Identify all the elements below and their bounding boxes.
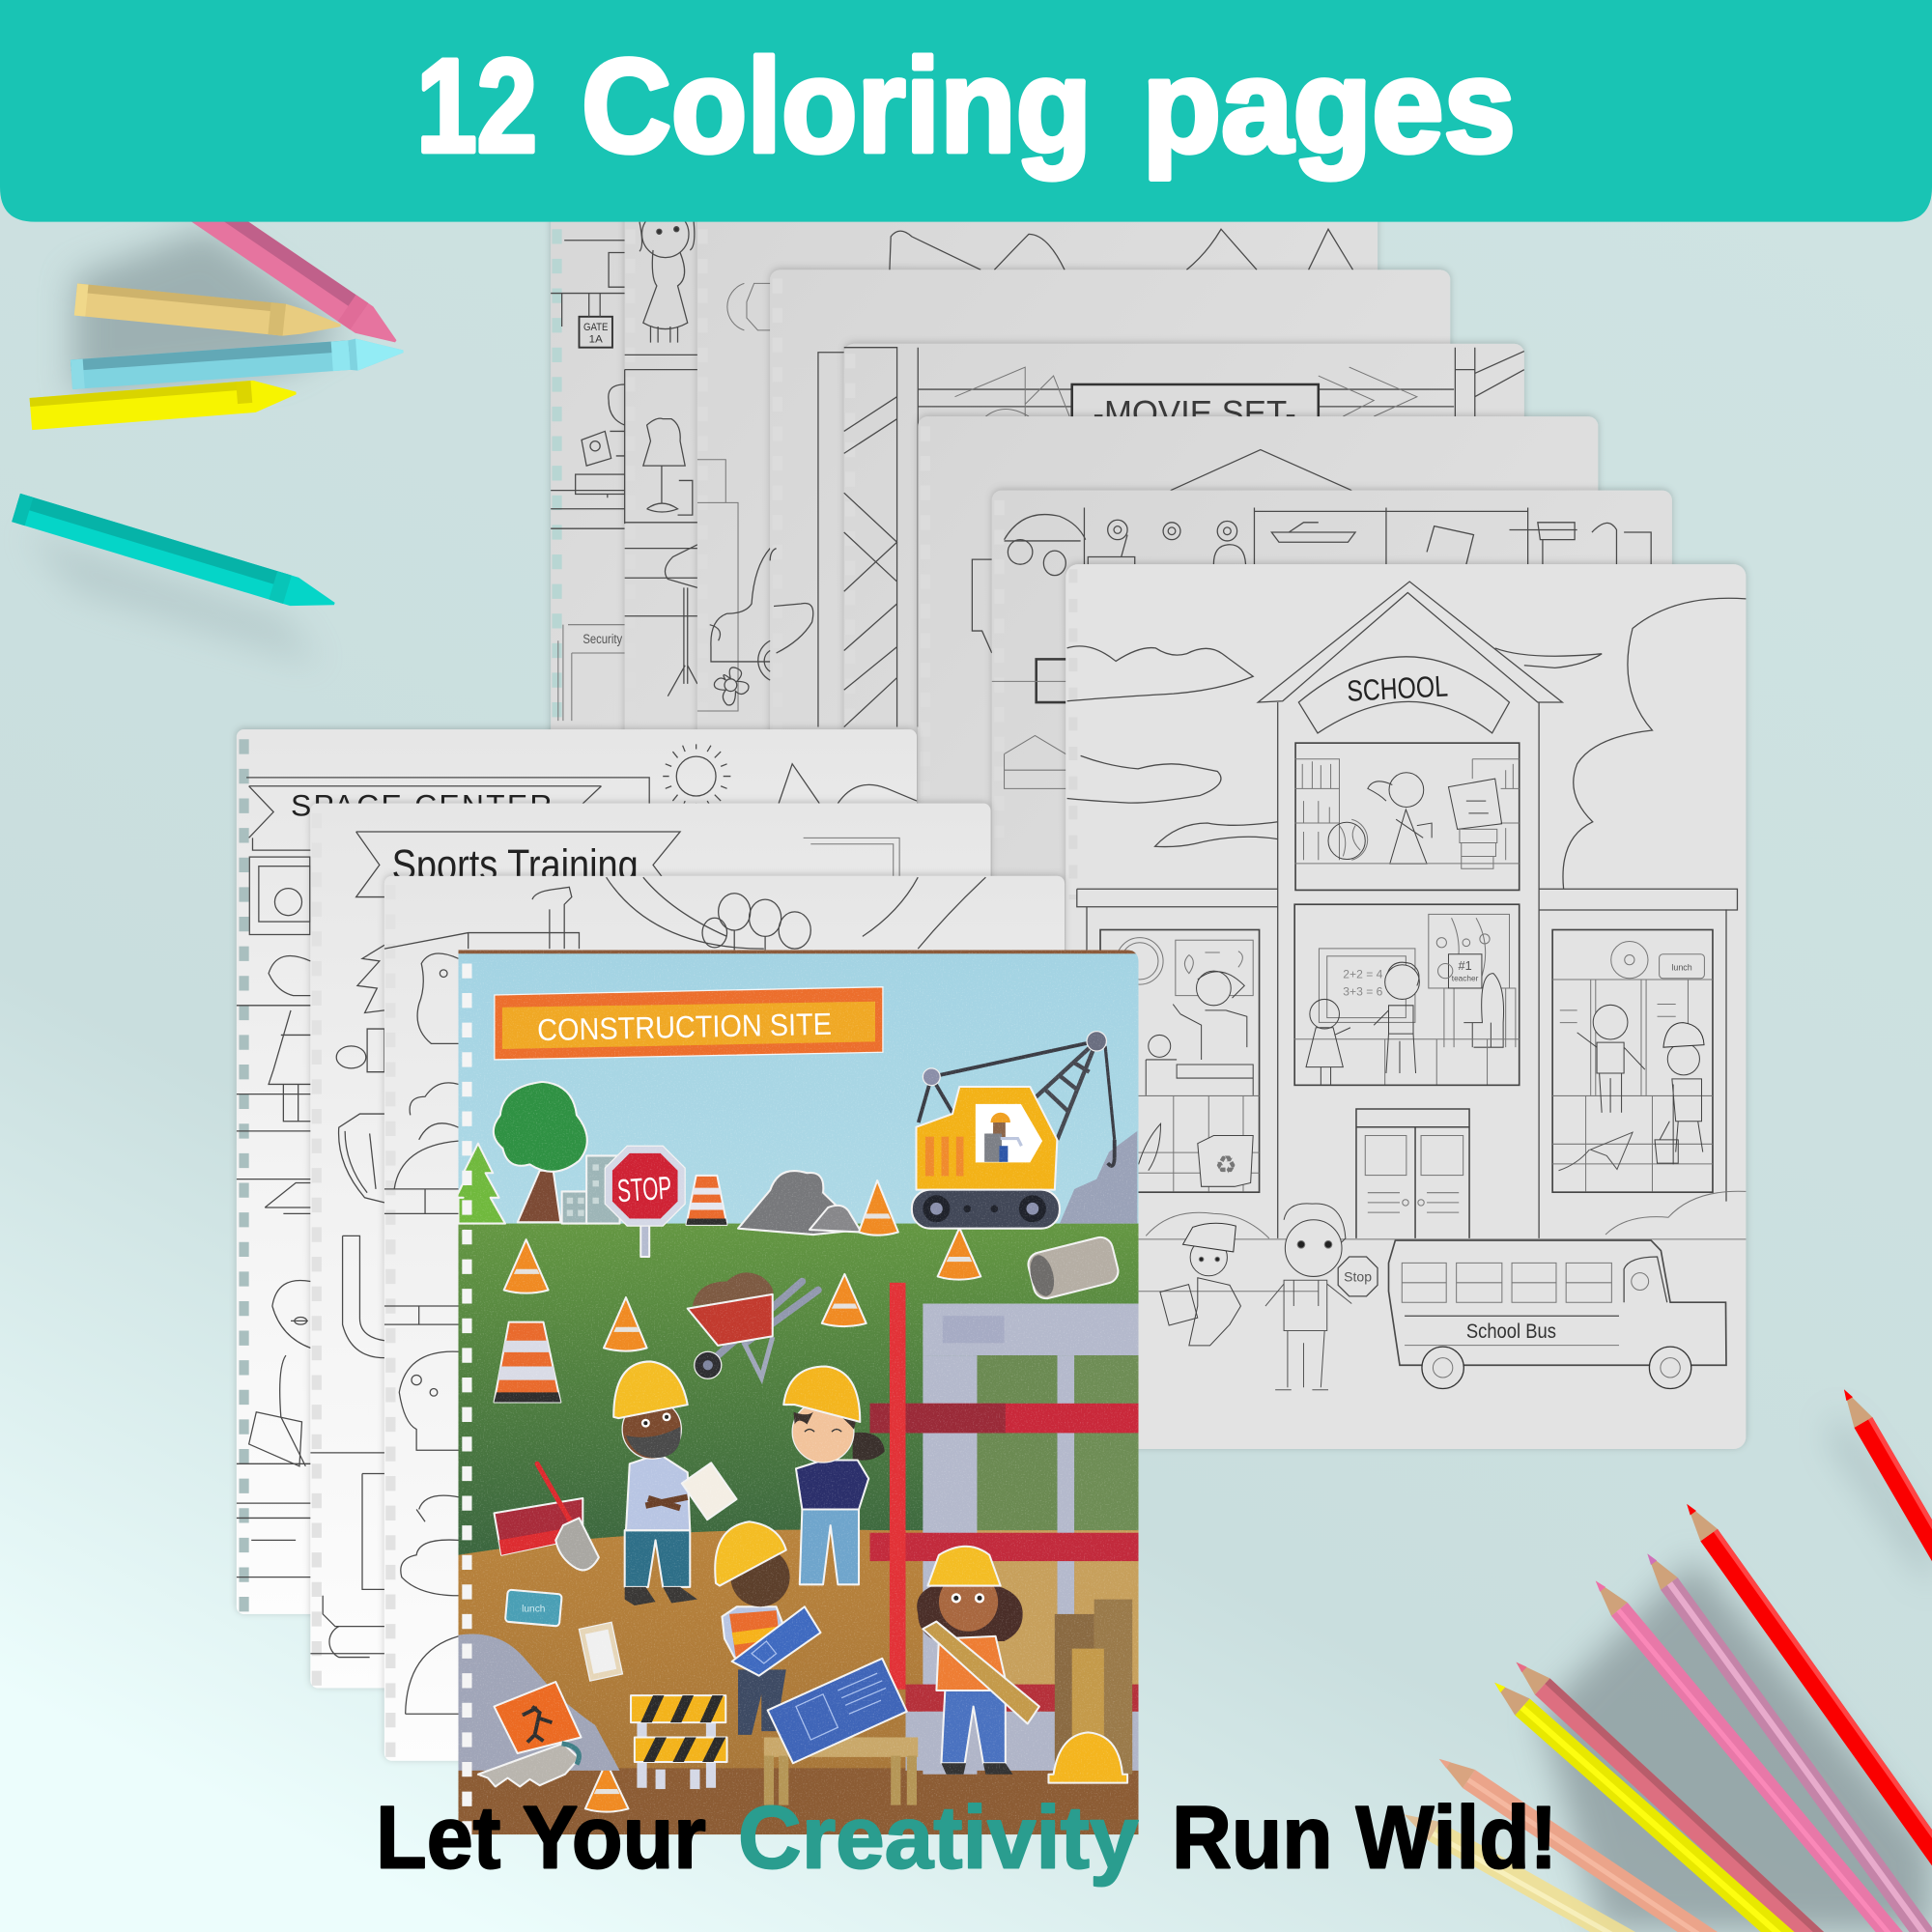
project banner: CONSTRUCTION SITE xyxy=(537,1007,832,1047)
header title xyxy=(416,32,1516,181)
dirt xyxy=(458,1529,1139,1771)
rock mound xyxy=(458,1634,620,1771)
designer figure xyxy=(639,211,695,343)
door xyxy=(1356,1109,1469,1238)
hand saw xyxy=(478,1744,579,1786)
pencil: yellow xyxy=(1488,1674,1862,1932)
zoo animals xyxy=(384,953,458,1714)
left window: art teacher: ♻ xyxy=(1215,1151,1237,1179)
truss tower right xyxy=(1455,348,1524,416)
lunch box: lunch xyxy=(522,1604,545,1614)
middle window: classroom: 2+2 = 4 xyxy=(1343,968,1383,981)
building outline xyxy=(1077,582,1737,1238)
clouds xyxy=(1067,598,1746,889)
school bus xyxy=(1389,1240,1726,1389)
stop sign: STOP xyxy=(616,1170,672,1209)
sign: gate 1A: GATE xyxy=(583,322,609,333)
space center banner: SPACE CENTER xyxy=(291,787,552,822)
pine tree xyxy=(456,1144,505,1224)
school banner xyxy=(1298,657,1509,733)
crayon: gold xyxy=(74,283,342,341)
pencil: red xyxy=(1678,1498,1932,1882)
crayons xyxy=(12,188,405,618)
stop paddle: Stop xyxy=(1344,1269,1372,1285)
worker: woman with plank xyxy=(917,1547,1039,1775)
crayon: teal xyxy=(12,494,339,618)
city buildings xyxy=(562,1155,620,1224)
traveller with magazine xyxy=(576,384,625,497)
page: blank top xyxy=(758,270,1450,1154)
sawhorse table and blueprint xyxy=(764,1659,918,1805)
clipboard xyxy=(579,1622,622,1681)
middle window: classroom: #1 xyxy=(1458,958,1472,973)
construction sign xyxy=(494,1682,582,1753)
pencil: peach xyxy=(1433,1749,1803,1932)
header title: pages xyxy=(1142,32,1516,181)
paper speckle texture xyxy=(458,950,1139,1834)
sign: gate 1A: 1A xyxy=(589,334,603,346)
crayon: light blue xyxy=(71,335,405,390)
pencil: coral xyxy=(1509,1654,1875,1932)
truss tower left xyxy=(844,348,918,727)
page: sets and car xyxy=(697,197,1378,1082)
balloons xyxy=(702,894,810,950)
car rear xyxy=(710,549,770,662)
page: airport xyxy=(551,49,1231,934)
project banner xyxy=(495,987,883,1060)
right window: staff xyxy=(1552,929,1713,1192)
page: boutique xyxy=(625,124,1305,1008)
pencil: pink xyxy=(1587,1575,1932,1932)
page: house roof xyxy=(918,416,1598,1301)
left window: art teacher xyxy=(1100,929,1260,1192)
tagline: Let Your xyxy=(376,1789,706,1888)
tree xyxy=(494,1082,587,1222)
crossing guard xyxy=(1265,1204,1351,1390)
crayon: pink xyxy=(182,188,405,355)
lunch box xyxy=(505,1590,562,1627)
toolbox and shovel xyxy=(494,1463,599,1570)
crayon: yellow xyxy=(30,377,298,430)
sports training banner xyxy=(356,832,680,897)
space center banner xyxy=(246,778,649,838)
wheelbarrow xyxy=(688,1272,818,1378)
pencil: mauve xyxy=(1639,1548,1932,1932)
security booth xyxy=(558,625,625,721)
page: sports training xyxy=(310,804,991,1688)
space center details xyxy=(237,838,310,1577)
tent shapes xyxy=(955,367,1417,416)
page: school xyxy=(1065,564,1746,1449)
header band xyxy=(0,0,1932,222)
movie set sign: -MOVIE SET- xyxy=(1093,394,1296,433)
pencil: red right xyxy=(1835,1384,1932,1640)
flower pot xyxy=(714,668,749,705)
page: movie set xyxy=(844,344,1524,1229)
dress form xyxy=(643,418,693,515)
security booth: Security xyxy=(582,631,622,646)
traffic cones xyxy=(504,1180,980,1812)
middle window: classroom xyxy=(1293,904,1520,1085)
mountain outlines xyxy=(890,229,1353,270)
barricade xyxy=(631,1695,727,1789)
car front xyxy=(758,549,813,680)
beams xyxy=(918,389,1454,407)
stop paddle xyxy=(1338,1257,1378,1296)
unfinished building xyxy=(906,1303,1139,1775)
school bus: School Bus xyxy=(1466,1319,1556,1343)
sign: gate 1A xyxy=(579,294,612,348)
ground lines and bushes xyxy=(1139,1191,1746,1292)
worker: blueprint carrier xyxy=(715,1521,820,1735)
studio lamp xyxy=(665,545,697,696)
crane xyxy=(912,1032,1115,1229)
page: kitchen xyxy=(992,491,1672,1375)
worker: bearded man xyxy=(613,1361,736,1605)
page: space center xyxy=(237,729,917,1614)
gravel mound xyxy=(1060,1131,1137,1224)
red scaffold xyxy=(870,1283,1139,1712)
sports training banner: Sports Training xyxy=(392,842,639,890)
giraffe and arches xyxy=(384,877,985,949)
spiral perforations xyxy=(463,963,470,1836)
sun xyxy=(663,744,730,809)
right window: staff: lunch xyxy=(1671,962,1692,972)
traffic barrel small xyxy=(686,1176,727,1225)
kid with cap xyxy=(1160,1223,1240,1346)
rock pile xyxy=(738,1171,862,1235)
page: zoo xyxy=(384,876,1065,1761)
school banner: SCHOOL xyxy=(1347,669,1449,708)
header title: Coloring xyxy=(582,32,1092,181)
cone bands xyxy=(514,1213,972,1794)
kitchen shelf items xyxy=(1005,508,1651,576)
lumber stack xyxy=(1055,1600,1132,1775)
middle window: classroom: teacher xyxy=(1452,973,1479,982)
tagline xyxy=(376,1789,1557,1888)
hoop backboard xyxy=(804,838,899,876)
cover: construction site xyxy=(456,950,1139,1836)
tagline: Creativity xyxy=(738,1789,1139,1888)
tagline: Run Wild! xyxy=(1172,1789,1557,1888)
upper window: teacher xyxy=(1295,743,1520,890)
concrete pipe xyxy=(1026,1235,1121,1301)
grass xyxy=(458,1224,1139,1556)
worker: woman with ponytail xyxy=(783,1367,885,1584)
header title: 12 xyxy=(416,32,537,181)
ground strip xyxy=(458,1768,1139,1834)
middle window: classroom: 3+3 = 6 xyxy=(1343,985,1383,999)
hard hat on ground xyxy=(1048,1732,1127,1783)
sports details xyxy=(310,945,384,1658)
movie set sign xyxy=(1072,384,1319,434)
pencil: pale yellow xyxy=(1399,1804,1762,1932)
colored pencils xyxy=(1399,1384,1932,1932)
traffic barrel large xyxy=(494,1322,560,1403)
stop sign xyxy=(605,1146,685,1257)
